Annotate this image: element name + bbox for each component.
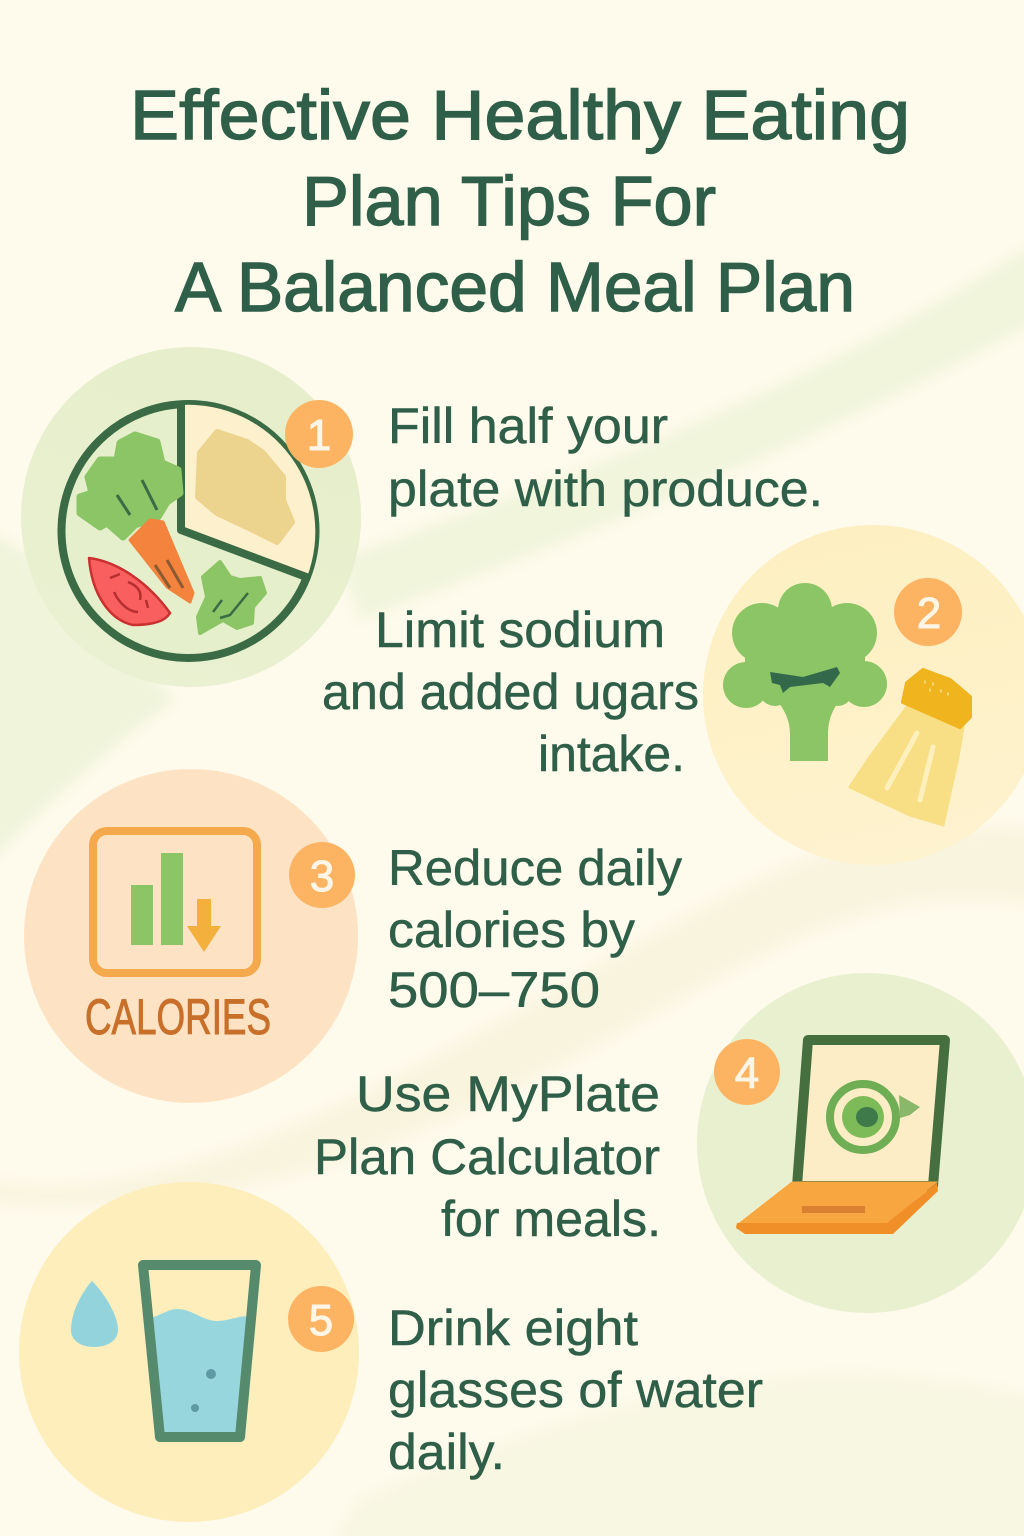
tip 2 text: Limit sodium xyxy=(375,602,665,658)
tip 4 text: for meals. xyxy=(441,1191,661,1247)
number badge 3: 3 xyxy=(310,852,334,901)
tip 2 text: intake. xyxy=(538,726,685,782)
icon: calories chart: CALORIES xyxy=(85,989,271,1045)
title: Plan Tips For xyxy=(302,162,716,240)
title xyxy=(130,76,910,326)
tip 1 text xyxy=(388,398,823,517)
tip 1: plate of produce xyxy=(21,347,823,687)
icon: water drop xyxy=(71,1281,118,1347)
number badge 4: 4 xyxy=(735,1049,759,1098)
tip 4 text: Use MyPlate xyxy=(356,1066,660,1122)
background circle 3 xyxy=(24,769,358,1103)
tip 5: drink water xyxy=(19,1182,763,1522)
number badge 2 xyxy=(894,578,962,646)
tip 3 text: 500–750 xyxy=(388,962,600,1018)
tip 5 text: Drink eight xyxy=(388,1300,638,1356)
icon: laptop xyxy=(736,1040,945,1234)
icon: divided plate xyxy=(62,404,316,658)
icon: calories chart xyxy=(85,831,271,1045)
tip 5 text xyxy=(388,1300,763,1480)
title: A Balanced Meal Plan xyxy=(175,248,855,326)
tip 3 text: Reduce daily xyxy=(388,840,682,896)
number badge 4 xyxy=(714,1039,780,1105)
tip 5 text: daily. xyxy=(388,1424,505,1480)
number badge 3 xyxy=(289,842,355,908)
icon: glass of water xyxy=(143,1265,256,1437)
tip 2: limit sodium and sugars xyxy=(322,525,1024,865)
icon: broccoli xyxy=(723,583,887,761)
tip 1 text: Fill half your xyxy=(388,398,668,454)
number badge 5: 5 xyxy=(309,1296,333,1345)
number badge 5 xyxy=(288,1286,354,1352)
background circle 5 xyxy=(19,1182,359,1522)
background circle 1 xyxy=(21,347,361,687)
tip 4 text xyxy=(314,1066,661,1247)
title: Effective Healthy Eating xyxy=(130,76,910,154)
tip 4: MyPlate calculator xyxy=(314,973,1024,1313)
number badge 1: 1 xyxy=(307,411,331,460)
tip 1 text: plate with produce. xyxy=(388,461,823,517)
background circle 4 xyxy=(697,973,1024,1313)
icon: salt shaker xyxy=(850,670,970,825)
tip 3: reduce calories xyxy=(24,769,682,1103)
number badge 2: 2 xyxy=(917,589,941,638)
tip 3 text: calories by xyxy=(388,902,635,958)
tip 3 text xyxy=(388,840,682,1018)
tip 2 text: and added ugars xyxy=(322,664,699,720)
tip 5 text: glasses of water xyxy=(388,1362,763,1418)
background circle 2 xyxy=(703,525,1024,865)
tip 4 text: Plan Calculator xyxy=(314,1129,660,1185)
tip 2 text xyxy=(322,602,699,782)
number badge 1 xyxy=(285,400,353,468)
